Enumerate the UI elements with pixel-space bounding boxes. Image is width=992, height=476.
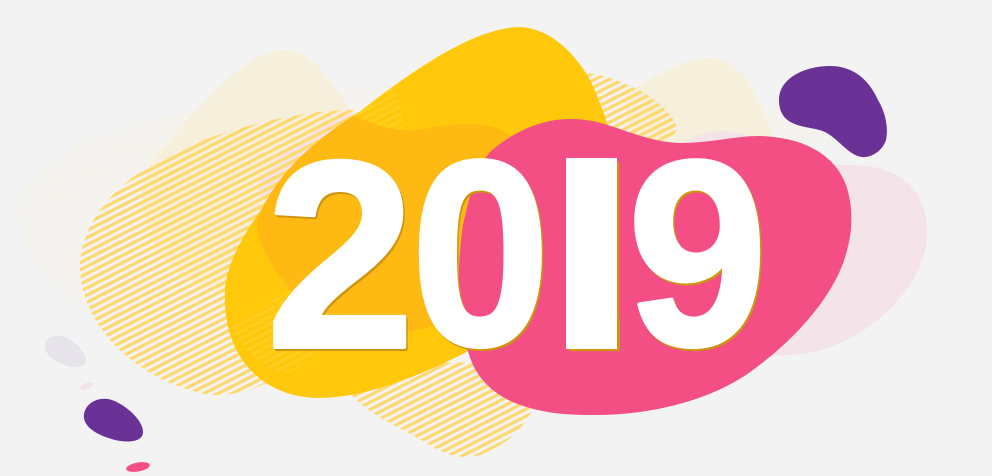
yellow blob [225, 27, 612, 398]
pale pink blob right [652, 131, 927, 356]
digit shadows: 1 [484, 98, 683, 408]
digits: 0 [411, 106, 550, 401]
purple blob top right [779, 66, 887, 157]
year heading: 2019 [273, 158, 762, 352]
faint hatch on yellow bottom [232, 285, 340, 372]
purple small blob [84, 399, 143, 442]
pink blob [459, 119, 851, 415]
cream blob upper left [142, 50, 365, 291]
hatched blob upper right [579, 72, 676, 145]
pink small blob [125, 460, 151, 474]
digit shadows [274, 162, 762, 352]
faint hatch on yellow top [352, 88, 403, 131]
cream blob upper right [625, 58, 775, 166]
pale pink small blob [79, 381, 95, 391]
digits: 9 [627, 105, 768, 401]
digits: 1 [483, 96, 681, 406]
faint hatch top right [760, 95, 830, 150]
lilac small blob [45, 336, 86, 367]
digit shadows: 0 [412, 108, 552, 403]
digits: 2 [266, 106, 415, 404]
digits [273, 158, 760, 350]
hatched blob bottom [352, 362, 532, 457]
pink tint under hatch [258, 112, 352, 200]
hatched blob left [80, 110, 395, 395]
digit shadows: 2 [267, 108, 416, 406]
digit shadows: 9 [629, 107, 769, 403]
faint hatched blob far left [19, 85, 400, 315]
darker overlap blob [257, 116, 531, 332]
